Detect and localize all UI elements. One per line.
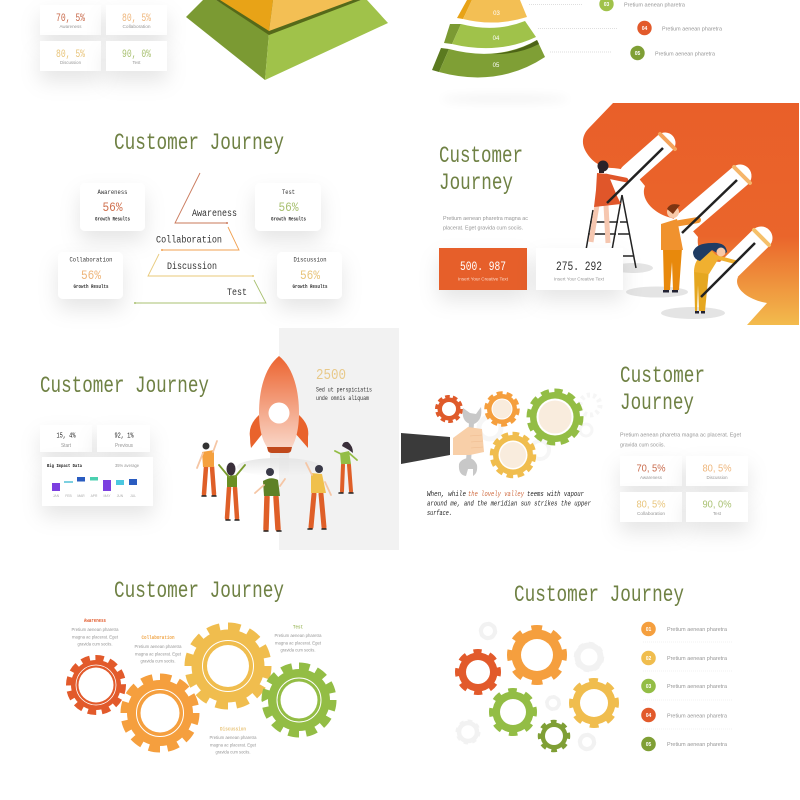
body text (443, 216, 528, 232)
card: discussion: Growth Results (292, 284, 328, 290)
text: test (274, 624, 322, 652)
panel: layered pyramid top right (432, 0, 723, 103)
text: discussion (210, 726, 257, 754)
bar chart card: JUN (117, 494, 124, 498)
title: Customer (620, 363, 705, 389)
stat cards: 90, 0% (702, 498, 732, 510)
body text (620, 432, 741, 448)
item 04: Pretium aenean pharetra (662, 26, 723, 32)
bar chart card (42, 457, 153, 506)
stat cards: 70, 5% (56, 13, 85, 25)
italic quote: When, while (427, 491, 466, 499)
person: woman with phone (335, 442, 357, 493)
title: Customer Journey (114, 130, 284, 156)
icon: rocket (237, 356, 321, 476)
text: collaboration: Collaboration (142, 635, 174, 641)
stat: 2500: 2500 (316, 367, 346, 384)
stat cards: Discussion (706, 475, 728, 480)
stat cards: 80, 5% (636, 498, 666, 510)
title: Journey (439, 170, 513, 196)
list item 03: Pretium aenean pharetra (667, 684, 728, 690)
gear: orange (486, 394, 518, 424)
card: test: 56% (278, 200, 299, 215)
item 03: 03 (604, 2, 609, 8)
path: discussion (148, 254, 254, 277)
title (439, 143, 523, 196)
stat card: white (536, 248, 623, 290)
text: test: Pretium aenean pharetra (274, 633, 322, 638)
gear: yellow (572, 680, 616, 726)
title: Customer (439, 143, 523, 169)
bar chart card: 35% average (115, 463, 139, 468)
item 05 (630, 46, 716, 60)
person: man in green (255, 468, 285, 531)
card: discussion (277, 252, 342, 299)
layer 05 (432, 40, 545, 77)
text: discussion: Pretium aenean pharetra (210, 735, 257, 740)
stat cards: Test (713, 511, 722, 516)
stat cards: Collaboration (122, 24, 151, 29)
stat cards: 70, 5% (636, 462, 666, 474)
layer 04: 04 (493, 36, 500, 42)
item 04: 04 (642, 26, 647, 32)
card: awareness (80, 183, 145, 231)
list item 03 (641, 679, 728, 693)
text: discussion: magna ac placerat. Eget (210, 742, 257, 748)
grey gears (457, 623, 602, 750)
bar chart card: FEB (65, 494, 73, 498)
stat cards (40, 5, 167, 71)
gear: orange (125, 678, 195, 748)
stat: 2500 (316, 367, 372, 402)
text: awareness: Awareness (84, 618, 106, 624)
item 03: Pretium aenean pharetra (624, 2, 686, 8)
grey background (279, 328, 399, 550)
italic quote: around me, and the meridian sun strikes the upper (427, 500, 591, 508)
leader lines (529, 4, 618, 52)
person: left arm raised (197, 441, 217, 496)
card: collaboration (58, 252, 123, 299)
card: collaboration: Growth Results (74, 284, 108, 290)
list item 02: Pretium aenean pharetra (667, 656, 728, 662)
stat card: white: Insert Your Creative Text (554, 276, 605, 282)
text: test: magna ac placerat. Eget (275, 640, 322, 646)
panel: journey steps (58, 130, 342, 304)
soft shadow (440, 95, 570, 103)
gear: orange (510, 628, 564, 682)
layer 04 (444, 21, 536, 48)
text: awareness: magna ac placerat. Eget (72, 634, 119, 640)
panel: gear cluster and list (457, 582, 733, 751)
person: woman bending (693, 243, 755, 314)
icon: wrench (459, 407, 481, 476)
body text: Pretium aenean pharetra magna ac placerat. Eget (620, 432, 741, 438)
panel: painters illustration (439, 103, 799, 325)
stat cards: 80, 5% (702, 462, 732, 474)
card: previous: Previous (115, 443, 133, 449)
card: awareness: Growth Results (95, 216, 130, 222)
card: collaboration: Collaboration (70, 256, 113, 264)
stat cards: Collaboration (637, 511, 666, 516)
item 05: Pretium aenean pharetra (655, 52, 716, 58)
card: discussion: Discussion (294, 256, 327, 264)
stat cards (620, 456, 748, 522)
list item 02 (641, 651, 728, 665)
text: collaboration (134, 635, 182, 664)
card: previous (97, 425, 150, 452)
list item 01: 01 (646, 627, 651, 633)
gear: green (492, 690, 534, 734)
icon: hand and sleeve (401, 427, 484, 464)
stat: 2500: Sed ut perspiciatis (316, 386, 372, 394)
title: Customer Journey (40, 373, 209, 399)
3D pyramid base (186, 0, 388, 80)
gear: green (266, 667, 332, 733)
panel: hand and gears (401, 363, 748, 522)
italic quote: the lovely valley (468, 491, 525, 499)
gear: red (70, 658, 122, 712)
item 04 (637, 21, 723, 35)
text: discussion: gravida cum sociis. (216, 750, 250, 754)
stat card: white: 275. 292 (556, 259, 602, 274)
person: man with roller (661, 180, 737, 292)
card: start: 15, 4% (56, 432, 76, 440)
gear: dark green (540, 722, 568, 750)
text: collaboration: Pretium aenean pharetra (134, 644, 182, 649)
stat cards: Test (132, 60, 141, 65)
card: start: Start (61, 443, 72, 449)
item 03 (599, 0, 686, 11)
list item 02: 02 (646, 656, 651, 662)
path: test (134, 280, 266, 304)
text: collaboration: gravida cum sociis. (140, 658, 176, 664)
list item 04 (641, 708, 728, 722)
body text: Pretium aenean pharetra magna ac (443, 216, 528, 222)
list item 05: Pretium aenean pharetra (667, 742, 728, 748)
ground shadows (613, 263, 725, 319)
layer 03 (457, 0, 527, 23)
bar chart card: JAN (53, 494, 60, 498)
gear: red (458, 652, 498, 692)
body text: placerat. Eget gravida cum sociis. (443, 226, 523, 232)
bar chart card: JUL (130, 494, 136, 498)
card: collaboration: 56% (81, 268, 101, 283)
card: previous: 92, 1% (114, 432, 134, 440)
bar chart card: APR (91, 494, 98, 498)
stat cards: 80, 5% (122, 13, 151, 25)
layer 05: 05 (493, 63, 500, 69)
italic quote: teems with vapour (527, 491, 584, 499)
card: discussion: 56% (300, 268, 320, 283)
card: test (255, 183, 321, 231)
path: collaboration: Collaboration (156, 234, 222, 246)
stat cards: 80, 5% (56, 49, 85, 61)
item 05: 05 (635, 51, 640, 57)
title: Customer Journey (514, 582, 684, 608)
ladder (586, 195, 636, 268)
stat cards: Awareness (60, 24, 82, 29)
person: man in yellow (306, 463, 331, 529)
dividers (643, 642, 733, 729)
italic quote: surface. (427, 510, 452, 518)
text: test: Test (293, 624, 303, 630)
card: test: Growth Results (271, 216, 306, 222)
stat cards: Awareness (640, 475, 663, 480)
stat cards: Discussion (60, 60, 81, 65)
gear: yellow (492, 434, 534, 476)
list item 04: Pretium aenean pharetra (667, 714, 728, 720)
path: awareness (175, 173, 237, 224)
text: awareness (72, 618, 119, 646)
layer 03: 03 (493, 11, 500, 17)
bar chart card: Big Impact Data (47, 463, 82, 469)
stat: 2500: unde omnis aliquam (316, 395, 369, 402)
stat card: orange (439, 248, 527, 290)
title: Journey (620, 390, 694, 416)
text: test: gravida cum sociis. (280, 648, 316, 652)
path: test: Test (227, 288, 247, 299)
person: woman both arms up (219, 462, 245, 520)
gear: green (530, 392, 580, 442)
decorative grey gears (479, 395, 600, 459)
person: woman on ladder (591, 148, 663, 243)
stat card: orange: Insert Your Creative Text (458, 276, 509, 282)
stat cards: 90, 0% (122, 49, 151, 61)
list item 01: Pretium aenean pharetra (667, 627, 728, 633)
panel: rocket launch (40, 328, 399, 550)
title: Customer Journey (114, 578, 284, 604)
text: collaboration: magna ac placerat. Eget (135, 652, 182, 656)
path: awareness: Awareness (192, 209, 237, 220)
card: awareness: Awareness (98, 189, 128, 196)
card: awareness: 56% (102, 200, 123, 215)
list item 01 (641, 622, 728, 636)
gear: red (437, 397, 461, 421)
list item 04: 04 (646, 713, 651, 719)
card: test: Test (282, 189, 295, 196)
text: awareness: gravida cum sociis. (78, 642, 112, 646)
card: start (40, 425, 92, 452)
path: discussion: Discussion (167, 261, 217, 273)
body text: gravida cum sociis. (620, 442, 665, 448)
list item 03: 03 (646, 684, 651, 690)
text: awareness: Pretium aenean pharetra (72, 627, 119, 632)
text: discussion: Discussion (220, 726, 246, 732)
bar chart card: MAY (104, 494, 111, 498)
gear: yellow (190, 628, 266, 704)
italic quote (427, 491, 591, 518)
title (620, 363, 705, 416)
path: collaboration (156, 227, 239, 251)
panel: stats and pyramid top left (40, 0, 388, 80)
panel: four gears (70, 578, 332, 754)
list item 05 (641, 737, 728, 751)
bar chart card: MAR (77, 494, 85, 498)
list item 05: 05 (646, 742, 651, 748)
orange roller background (583, 103, 799, 325)
stat card: orange: 500. 987 (460, 259, 506, 274)
